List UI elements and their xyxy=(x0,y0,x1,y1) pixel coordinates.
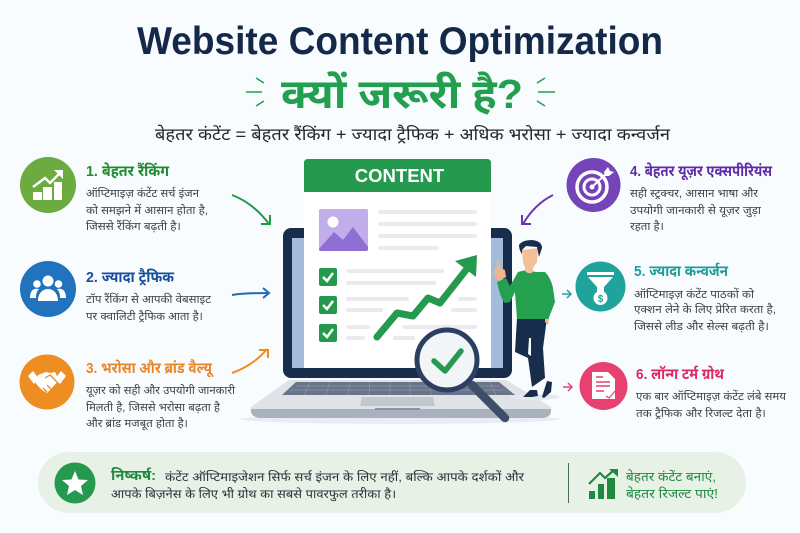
tagline: बेहतर कंटेंट = बेहतर रैंकिंग + ज्यादा ट्रैफिक + अधिक भरोसा + ज्यादा कन्वर्जन xyxy=(155,125,671,144)
panel: 6 long term growth: तक ट्रैफिक और रिजल्ट देता है। xyxy=(636,407,766,420)
icon: funnel with dollar xyxy=(576,262,626,312)
panel: 2 more traffic: टॉप रैंकिंग से आपकी वेबसाइट xyxy=(86,292,211,306)
panel: 4 better user experience xyxy=(566,158,773,233)
icon: bar chart with arrow xyxy=(589,469,618,499)
document header xyxy=(304,159,491,192)
panel: 2 more traffic: 2. ज्यादा ट्रैफिक xyxy=(86,268,175,286)
trousers xyxy=(515,318,547,387)
panel: 3 trust and brand value: यूज़र को सही और उपयोगी जानकारी xyxy=(86,384,236,398)
icon: handshake xyxy=(20,354,74,410)
panel: 5 more conversion: ऑप्टिमाइज़ कंटेंट पाठकों को xyxy=(634,287,755,301)
panel: 3 trust and brand value: 3. भरोसा और ब्रांड वैल्यू xyxy=(86,359,214,378)
hand and finger xyxy=(494,260,506,281)
shoes xyxy=(523,381,552,398)
content document xyxy=(304,159,491,368)
panel: 6 long term growth xyxy=(580,362,786,420)
arrow: trust to laptop xyxy=(232,349,268,373)
icon: funnel with dollar: $ xyxy=(598,294,604,305)
panel: 1 better ranking xyxy=(20,157,208,233)
icon: document xyxy=(580,362,628,410)
image placeholder xyxy=(319,209,368,251)
icon: star xyxy=(54,462,96,504)
call to action: बेहतर कंटेंट बनाएं, xyxy=(626,469,716,484)
panel: 3 trust and brand value xyxy=(20,354,236,431)
panel: 1 better ranking: को समझने में आसान होता है, xyxy=(86,203,208,217)
arrow: experience to person xyxy=(522,195,553,224)
panel: 5 more conversion: एक्शन लेने के लिए प्रेरित करता है, xyxy=(634,303,776,316)
conclusion banner xyxy=(38,452,746,513)
laptop illustration xyxy=(240,228,560,424)
document header: CONTENT xyxy=(355,165,445,186)
sweater xyxy=(497,270,555,320)
panel: 2 more traffic: पर क्वालिटी ट्रैफिक आता है। xyxy=(86,310,203,323)
checkbox 3 xyxy=(319,324,337,342)
title: Website Content Optimization xyxy=(137,20,663,63)
growth arrow xyxy=(377,255,477,337)
panel: 4 better user experience: उपयोगी जानकारी से यूज़र जुड़ा xyxy=(630,204,762,218)
hair xyxy=(519,240,542,257)
arrow: person to long term growth xyxy=(563,383,572,391)
laptop screen xyxy=(283,228,512,378)
conclusion text: निष्कर्ष: xyxy=(111,467,156,483)
panel: 4 better user experience: रहता है। xyxy=(630,220,664,233)
person pointing xyxy=(494,240,559,400)
icon: target xyxy=(566,158,620,212)
checkbox 1 xyxy=(319,268,337,286)
call to action xyxy=(626,469,718,501)
subtitle: question in Hindi: क्यों जरूरी है? xyxy=(281,70,523,117)
conclusion text: कंटेंट ऑप्टिमाइजेशन सिर्फ सर्च इंजन के लिए नहीं, बल्कि आपके दर्शकों और xyxy=(165,469,525,484)
icon: people group xyxy=(20,261,76,317)
panel: 4 better user experience: 4. बेहतर यूज़र एक्सपीरियंस xyxy=(630,162,773,181)
panel: 6 long term growth: 6. लॉन्ग टर्म ग्रोथ xyxy=(636,365,724,383)
conclusion text: आपके बिज़नेस के लिए भी ग्रोथ का सबसे पावरफुल तरीका है। xyxy=(111,486,396,502)
icon: growth chart xyxy=(20,157,76,213)
panel: 1 better ranking: 1. बेहतर रैंकिंग xyxy=(86,162,170,180)
call to action: बेहतर रिजल्ट पाएं! xyxy=(626,486,718,501)
panel: 5 more conversion: जिससे लीड और सेल्स बढ़ती है। xyxy=(634,320,769,333)
head xyxy=(522,248,538,273)
magnifying glass xyxy=(417,330,505,418)
laptop base xyxy=(251,380,551,418)
panel: 5 more conversion: 5. ज्यादा कन्वर्जन xyxy=(634,262,729,280)
panel: 1 better ranking: जिससे रैंकिंग बढ़ती है। xyxy=(86,219,181,233)
panel: 4 better user experience: सही स्ट्रक्चर, आसान भाषा और xyxy=(630,187,758,200)
checkbox 2 xyxy=(319,296,337,314)
arrow: person to conversion xyxy=(562,290,571,298)
arrow: traffic to laptop xyxy=(232,288,269,298)
text lines xyxy=(346,210,477,340)
panel: 6 long term growth: एक बार ऑप्टिमाइज़ कंटेंट लंबे समय xyxy=(636,389,786,403)
panel: 2 more traffic xyxy=(20,261,211,323)
panel: 3 trust and brand value: मिलती है, जिससे भरोसा बढ़ता है xyxy=(86,401,221,414)
conclusion text xyxy=(111,467,525,502)
panel: 5 more conversion xyxy=(576,262,776,333)
panel: 1 better ranking: ऑप्टिमाइज़ कंटेंट सर्च इंजन xyxy=(86,186,200,200)
arrow: ranking to laptop xyxy=(232,195,270,224)
panel: 3 trust and brand value: और ब्रांड मजबूत होता है। xyxy=(86,417,188,431)
